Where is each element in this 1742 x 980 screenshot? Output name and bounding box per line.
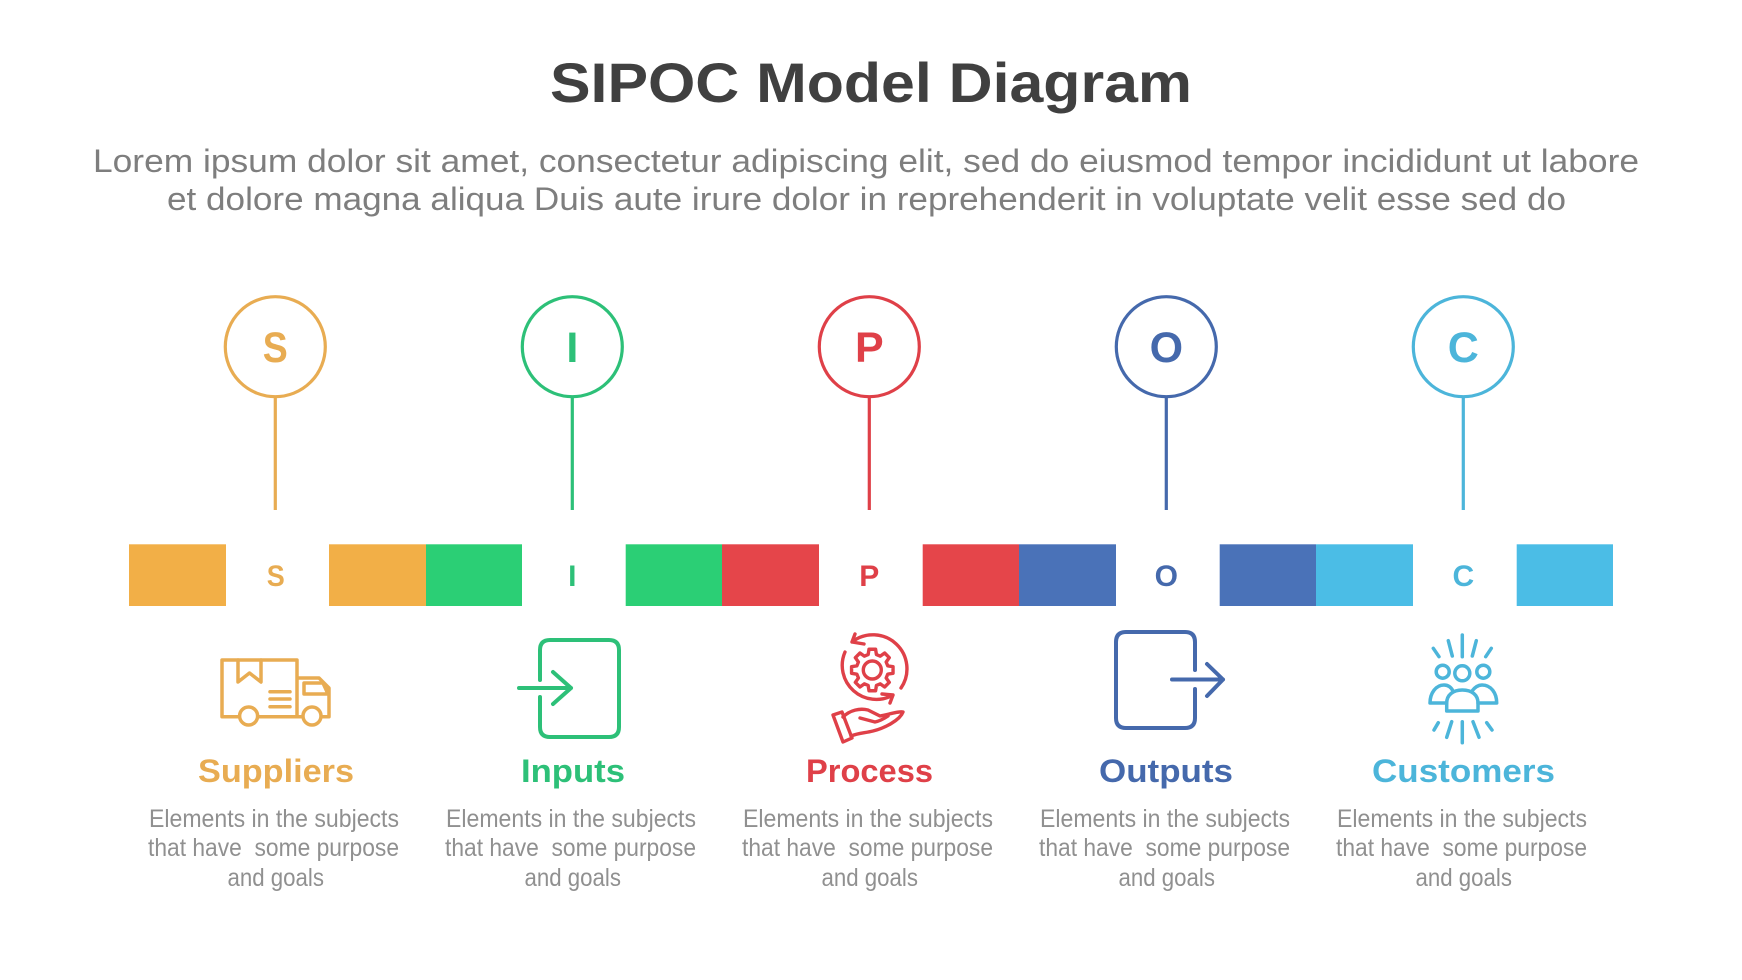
panel: inputs (426, 297, 722, 892)
pin: S circle and stem: S (263, 324, 288, 372)
bar segment: O: O (1155, 560, 1178, 593)
panel: outputs (1019, 297, 1316, 892)
description: Elements in the subjects (743, 805, 993, 833)
bar segment: O (1019, 544, 1316, 606)
description: and goals (1416, 864, 1512, 892)
description: that have some purpose (742, 834, 993, 862)
panel: suppliers (129, 297, 426, 892)
subtitle text block: et dolore magna aliqua Duis aute irure dolor in reprehenderit in voluptate velit esse sed do (167, 181, 1566, 217)
description: Elements in the subjects (1337, 805, 1587, 833)
heading: Customers: Customers (1372, 753, 1555, 789)
icon: output arrow out of box (1116, 632, 1223, 728)
bar segment: I: I (568, 560, 576, 593)
pin: C circle and stem (1413, 297, 1513, 510)
bar segment: I (426, 544, 722, 606)
pin: O circle and stem: O (1150, 324, 1183, 372)
panel: customers (1316, 297, 1613, 892)
bar segment: P: P (859, 560, 879, 593)
description: that have some purpose (1039, 834, 1290, 862)
pin: C circle and stem: C (1448, 324, 1479, 372)
description: that have some purpose (445, 834, 696, 862)
panel: process (722, 297, 1019, 892)
description: that have some purpose (1336, 834, 1587, 862)
heading: Process: Process (806, 753, 933, 789)
description: that have some purpose (148, 834, 399, 862)
subtitle text block: Lorem ipsum dolor sit amet, consectetur adipiscing elit, sed do eiusmod tempor incididunt ut labore (93, 143, 1639, 179)
description: and goals (524, 864, 621, 892)
title: SIPOC Model Diagram (550, 51, 1192, 114)
pin: I circle and stem: I (566, 324, 578, 372)
heading: Outputs: Outputs (1099, 753, 1233, 789)
pin: P circle and stem (819, 297, 919, 510)
bar segment: C: C (1452, 560, 1474, 593)
bar segment: S: S (267, 560, 285, 593)
bar segment: S (129, 544, 426, 606)
description (148, 805, 399, 892)
heading: Inputs: Inputs (521, 753, 625, 789)
description: and goals (228, 864, 324, 892)
subtitle text block (93, 143, 1639, 217)
description (1039, 805, 1290, 892)
icon: gear with cycle arrows over hand (833, 634, 907, 742)
bar segment: P (722, 544, 1019, 606)
icon: input arrow into box (519, 640, 619, 737)
description: Elements in the subjects (149, 805, 399, 833)
pin: O circle and stem (1116, 297, 1216, 510)
description (742, 805, 993, 892)
pin: P circle and stem: P (855, 324, 884, 372)
icon: delivery truck (222, 660, 329, 725)
description: Elements in the subjects (446, 805, 696, 833)
pin: I circle and stem (522, 297, 622, 510)
description (445, 805, 696, 892)
heading: Suppliers: Suppliers (198, 753, 354, 789)
bar segment: C (1316, 544, 1613, 606)
description: and goals (822, 864, 918, 892)
description: Elements in the subjects (1040, 805, 1290, 833)
pin: S circle and stem (225, 297, 325, 510)
description (1336, 805, 1587, 892)
icon: customer group with rays (1430, 635, 1497, 743)
description: and goals (1118, 864, 1215, 892)
